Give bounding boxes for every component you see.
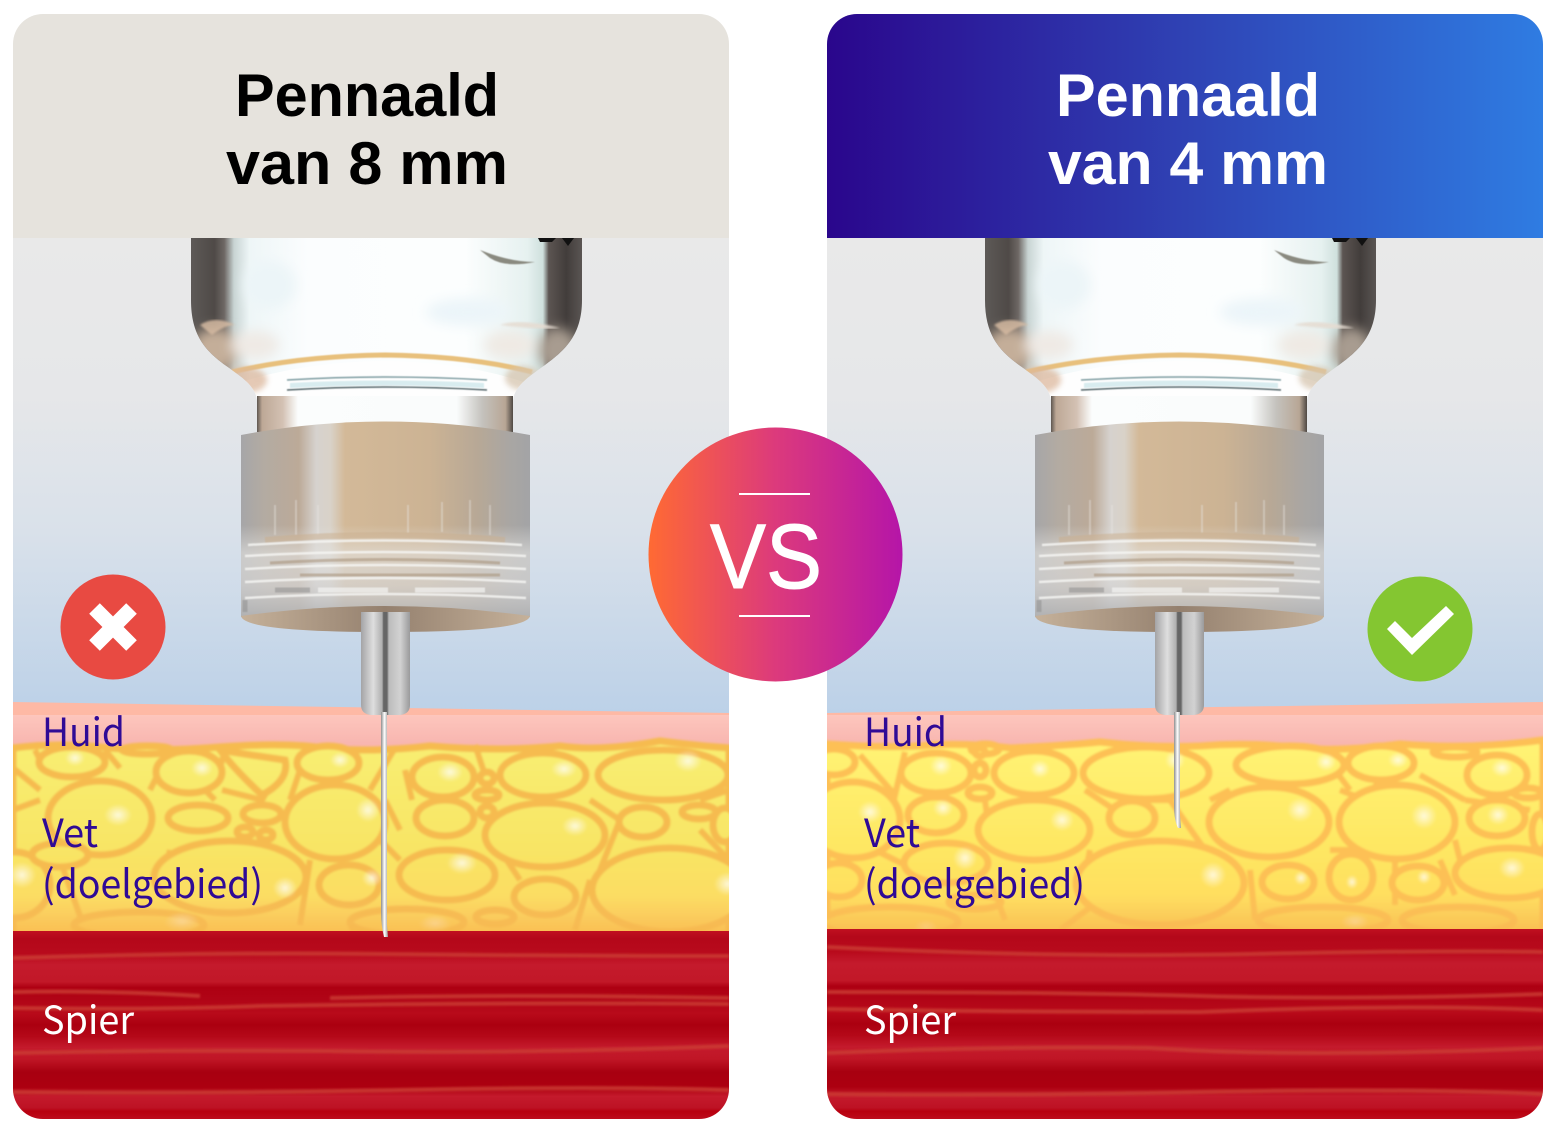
icon: green check bbox=[1368, 576, 1472, 682]
label: Vet (doelgebied): Vet bbox=[42, 803, 98, 859]
header: 4 mm: van 4 mm bbox=[1048, 130, 1328, 197]
background sky bbox=[827, 238, 1543, 713]
needle: 8 mm bbox=[381, 712, 388, 937]
header: 8 mm: Pennaald bbox=[235, 62, 499, 129]
background sky bbox=[13, 238, 729, 713]
label: Spier: Spier bbox=[42, 990, 135, 1046]
label: Vet (doelgebied): (doelgebied) bbox=[864, 854, 1085, 910]
skin layer bbox=[13, 702, 729, 748]
fat layer bbox=[806, 740, 1544, 940]
label: Huid: Huid bbox=[864, 702, 947, 758]
panel: 4 mm needle bbox=[806, 14, 1544, 1119]
label: Vet (doelgebied) bbox=[864, 818, 1082, 908]
label: Spier: Spier bbox=[864, 990, 957, 1046]
label: Vet (doelgebied): (doelgebied) bbox=[42, 854, 263, 910]
label: Huid: Huid bbox=[42, 702, 125, 758]
syringe: 8 mm bbox=[191, 238, 582, 715]
label: Vet (doelgebied) bbox=[42, 818, 260, 908]
VS badge: VS bbox=[710, 506, 822, 608]
header: 8 mm: van 8 mm bbox=[226, 130, 508, 197]
muscle layer bbox=[13, 931, 729, 1119]
VS badge bbox=[648, 428, 902, 682]
needle: 4 mm bbox=[1174, 712, 1181, 828]
header: 4 mm bbox=[827, 14, 1543, 238]
header: 4 mm: Pennaald bbox=[1056, 62, 1320, 129]
syringe: 4 mm bbox=[985, 238, 1376, 715]
panel: 8 mm needle bbox=[0, 14, 748, 1119]
skin layer bbox=[827, 702, 1543, 748]
icon: red cross bbox=[60, 574, 166, 680]
label: Vet (doelgebied): Vet bbox=[864, 803, 920, 859]
fat layer bbox=[0, 741, 748, 940]
muscle layer bbox=[827, 929, 1543, 1119]
header: 8 mm bbox=[13, 14, 729, 238]
